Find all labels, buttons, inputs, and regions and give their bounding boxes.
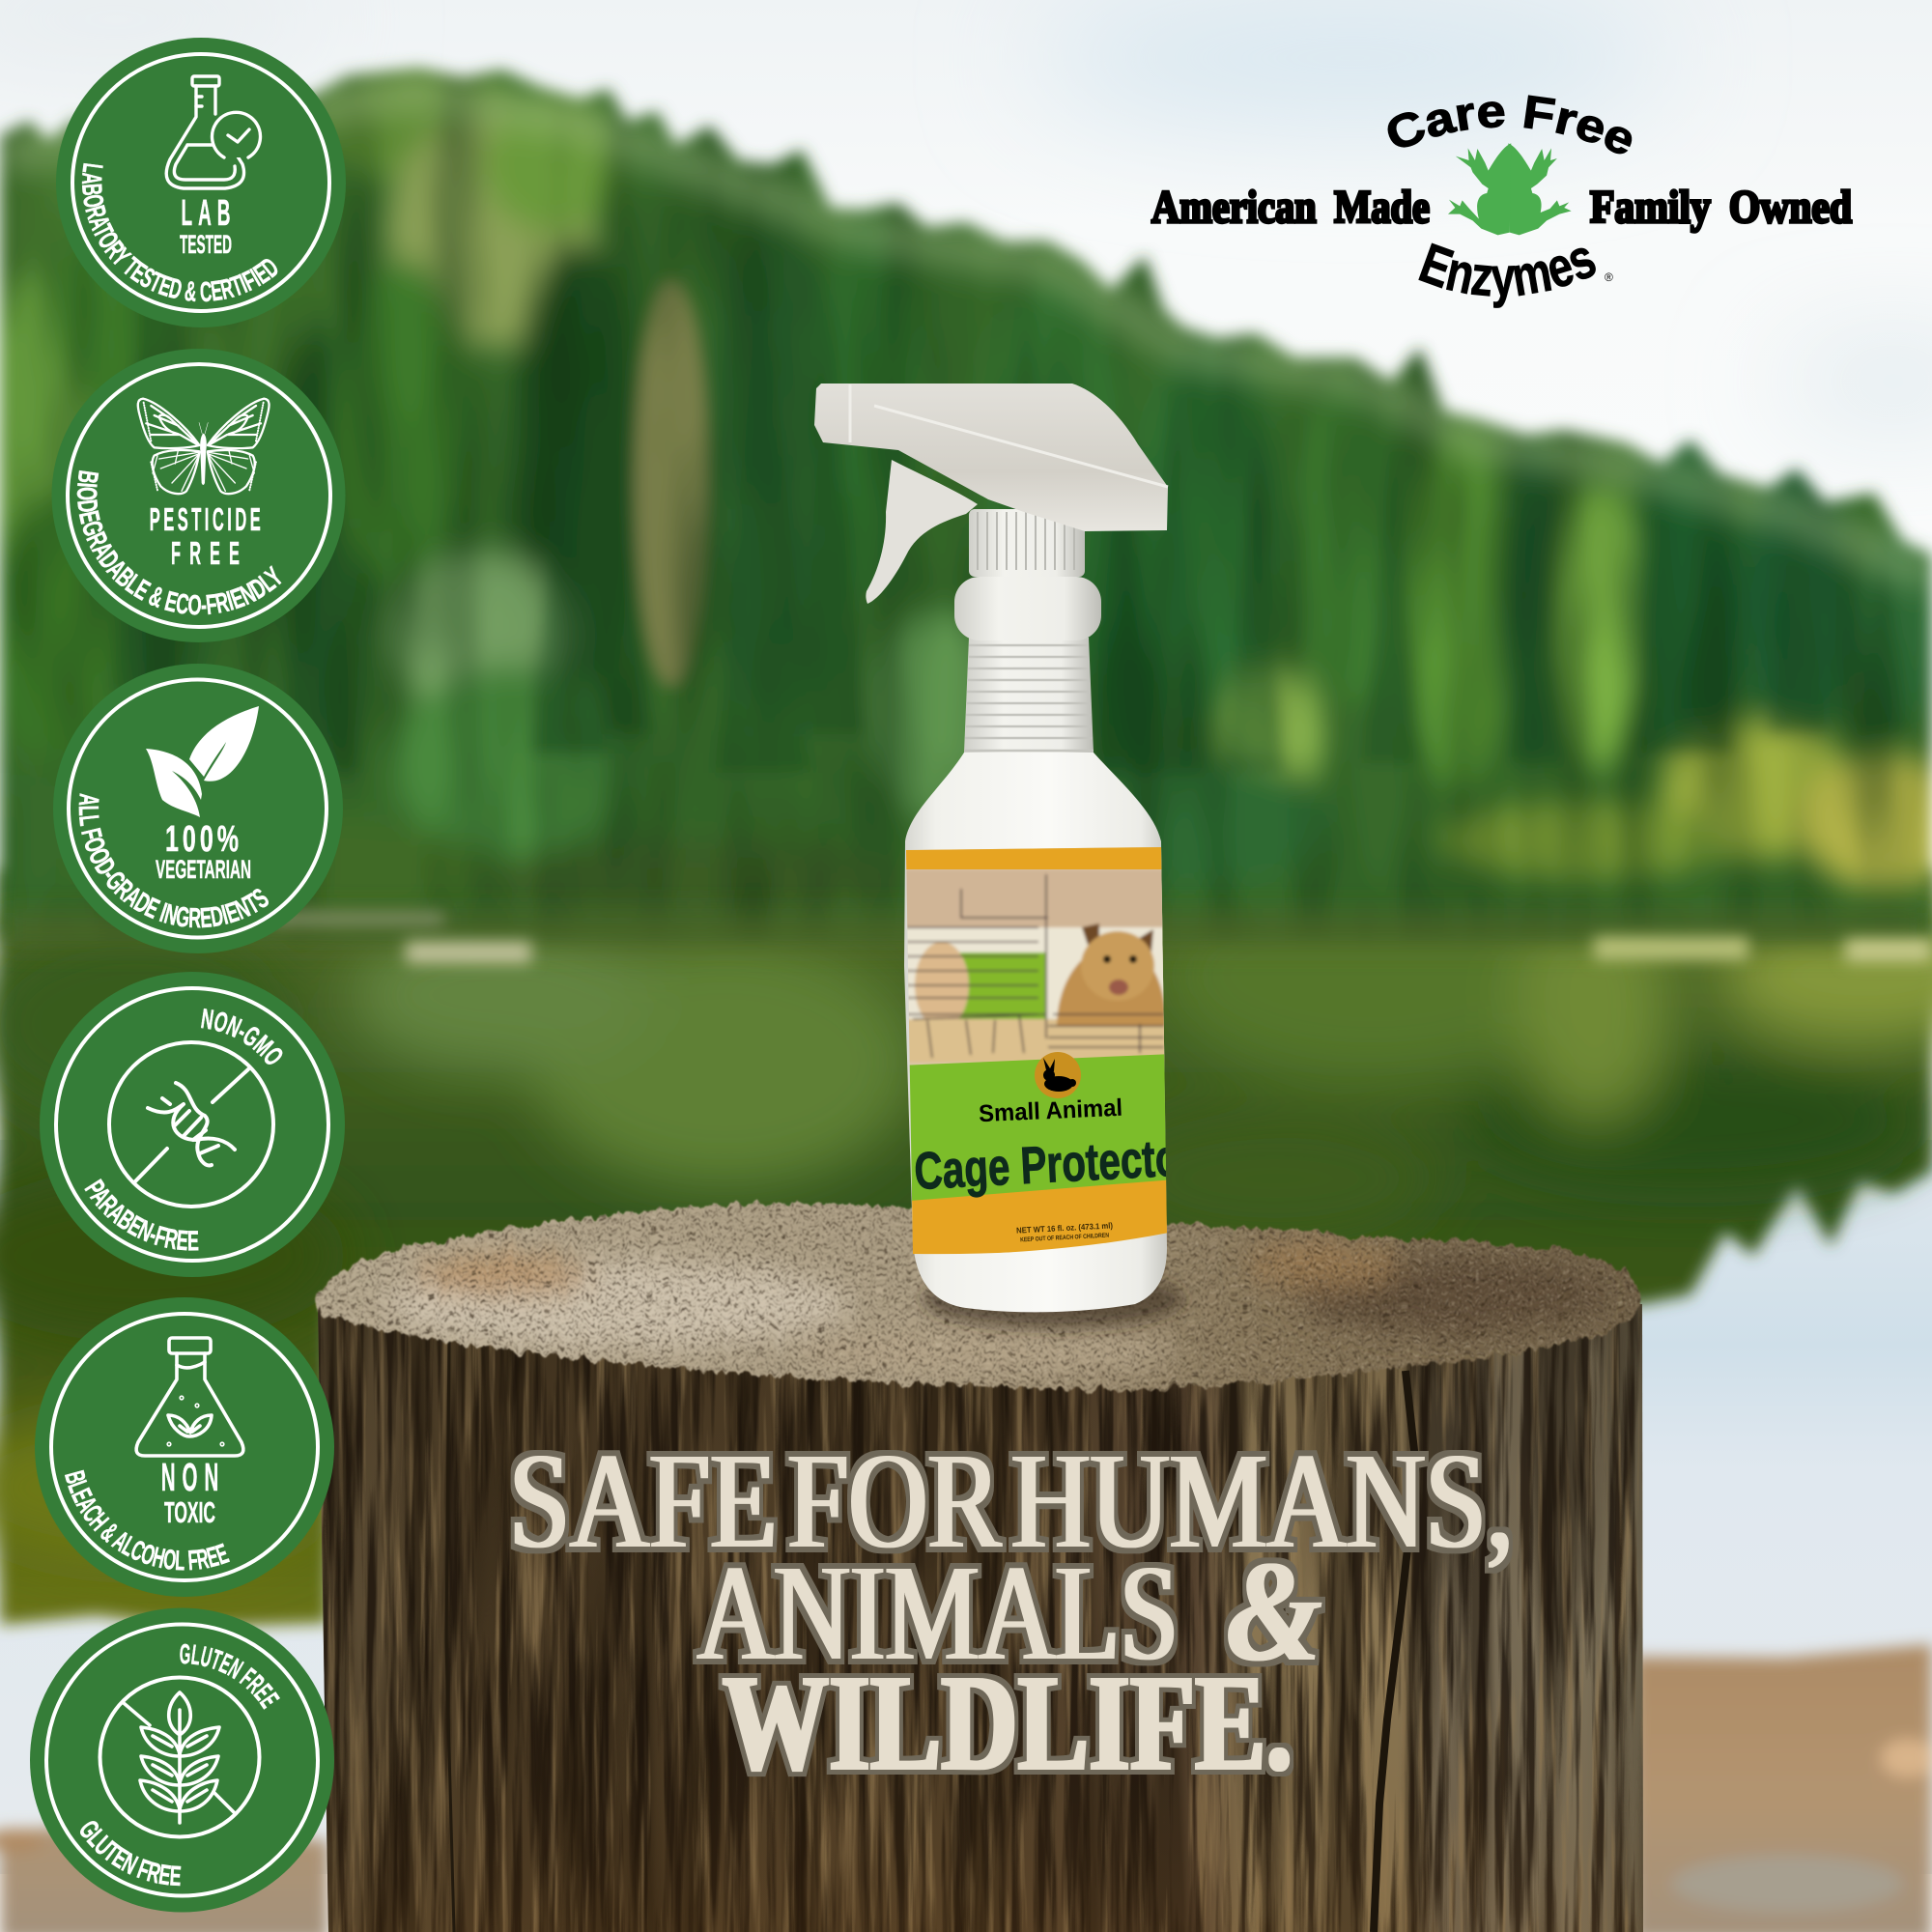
curved text: biodegradable: BIODEGRADABLE & ECO-FRIENDLY: [77, 469, 282, 615]
text: LAB: LAB: [181, 193, 237, 234]
sky reflection in water: [0, 1140, 1932, 1874]
curved text: gluten free bottom: GLUTEN FREE: [72, 1815, 182, 1892]
logo: Care Free Enzymes: [1151, 86, 1852, 309]
label text: small animal: Small Animal: [979, 1094, 1123, 1127]
logo icon: green frog: [1448, 143, 1572, 235]
logo text: Family Owned: Family Owned: [1590, 182, 1852, 233]
curved text: bleach and alcohol free: BLEACH & ALCOHOL FREE: [58, 1467, 233, 1577]
curved text: laboratory tested: LABORATORY TESTED & CERTIFIED: [81, 162, 278, 301]
label text: cage protector: Cage Protector: [913, 1128, 1196, 1201]
bottle body: [904, 753, 1167, 1312]
headline line 1: SAFE FOR HUMANS,: [509, 1424, 1514, 1577]
logo text: Enzymes: Enzymes: [1418, 243, 1596, 308]
icon: two leaves: [146, 706, 259, 817]
shoreline highlights: [270, 913, 1932, 963]
sprayer head: [814, 384, 1168, 531]
stump top: [309, 1198, 1652, 1401]
curved text: food grade: ALL FOOD-GRADE INGREDIENTS: [79, 793, 269, 927]
icon: butterfly: [138, 399, 270, 494]
text: VEGETARIAN: VEGETARIAN: [156, 855, 251, 884]
bottle shadow: [923, 1270, 1183, 1328]
label orange band bottom: [898, 1179, 1174, 1256]
ribbed cap: [969, 509, 1085, 577]
label orange band top: [898, 846, 1174, 869]
text: TESTED: TESTED: [180, 230, 232, 259]
text: 100%: 100%: [165, 818, 242, 859]
tree stump: [309, 1198, 1652, 1932]
crack: [1374, 1371, 1416, 1932]
badge: non toxic: [35, 1297, 334, 1597]
ground: [0, 1644, 1932, 1932]
headline line 3: WILDLIFE.: [723, 1646, 1293, 1799]
logo text: American Made: American Made: [1151, 182, 1430, 233]
curved text: paraben-free: PARABEN-FREE: [78, 1176, 199, 1257]
ribbed neck: [954, 577, 1101, 753]
badge: vegetarian: [53, 664, 343, 953]
ampersand: &: [1227, 1531, 1321, 1691]
text: FREE: FREE: [171, 535, 248, 572]
sky: [0, 0, 1932, 773]
icon: flask with leaves: [136, 1338, 243, 1456]
badge: non-GMO: [40, 972, 345, 1277]
label green panel: [898, 1054, 1174, 1203]
shoreline band: [0, 913, 1932, 946]
icon: DNA with slash: [135, 1069, 248, 1181]
label photo: cage and hamster: [898, 869, 1174, 1063]
stump side bark: [309, 1294, 1652, 1932]
text: NON: NON: [161, 1455, 225, 1499]
water with forest reflection: [0, 869, 1932, 1628]
badge: gluten free: [30, 1607, 334, 1913]
badge: lab tested: [56, 38, 346, 327]
curved text: non-GMO: NON-GMO: [199, 1004, 289, 1072]
badge: pesticide free: [52, 349, 346, 642]
label rabbit icon: [1035, 1052, 1081, 1098]
icon: wheat with slash: [124, 1692, 235, 1823]
logo text: Care Free: Care Free: [1387, 95, 1633, 155]
conifers: [113, 314, 1901, 780]
dead tree band: [635, 280, 708, 686]
headline line 2: ANIMALS: [697, 1536, 1179, 1689]
headline: [509, 1424, 1514, 1799]
hazy tree tops: [0, 92, 1932, 575]
product label: [898, 840, 1196, 1256]
forest: [0, 0, 1932, 947]
label text: warning: KEEP OUT OF REACH OF CHILDREN: [1020, 1233, 1109, 1243]
text: TOXIC: TOXIC: [164, 1495, 215, 1529]
product: spray bottle: [814, 384, 1196, 1312]
icon: lab flask with check: [166, 76, 261, 188]
logo registered mark: ®: [1605, 270, 1613, 284]
curved text: gluten free top: GLUTEN FREE: [179, 1639, 284, 1714]
label text: net weight: NET WT 16 fl. oz. (473.1 ml): [1016, 1220, 1113, 1236]
sprayer trigger: [866, 460, 978, 604]
text: PESTICIDE: PESTICIDE: [150, 501, 264, 538]
